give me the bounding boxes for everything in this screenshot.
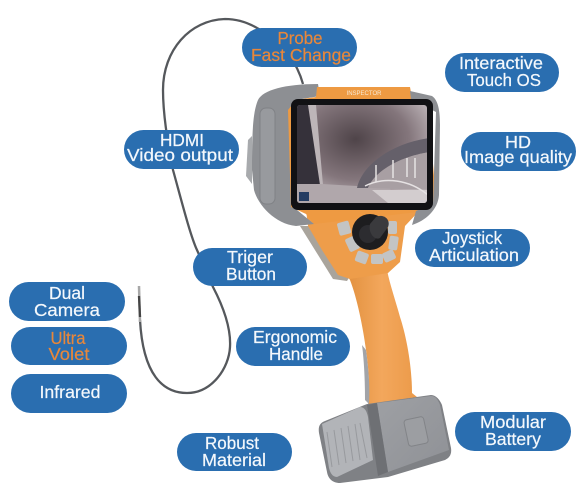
label: Joystick Articulation: Joystick — [442, 228, 502, 248]
label: Ergonomic Handle: Ergonomic — [253, 327, 337, 347]
label: HD Image quality — [461, 132, 576, 171]
label: Joystick Articulation — [415, 228, 530, 267]
label: Triger Button — [193, 247, 307, 286]
camera device — [246, 84, 451, 483]
grip underside — [300, 226, 350, 281]
label: Ergonomic Handle: Handle — [269, 344, 323, 364]
label: Joystick Articulation: Articulation — [429, 245, 519, 265]
label: Infrared — [11, 374, 127, 413]
label: HDMI Video output: Video output — [127, 145, 233, 165]
label: Modular Battery: Battery — [485, 429, 541, 449]
label: Interactive Touch OS — [445, 53, 559, 92]
label: Ultra Violet: Ultra — [50, 328, 86, 348]
left grey bumper — [252, 84, 320, 226]
brand label: INSPECTOR — [347, 91, 382, 97]
handle — [347, 270, 417, 405]
grip module — [306, 210, 420, 279]
screen bezel — [291, 99, 433, 210]
rear left tab — [246, 136, 252, 184]
label: HD Image quality: Image quality — [464, 147, 572, 167]
label: Dual Camera — [9, 282, 125, 321]
left button strip — [260, 108, 275, 204]
label: Modular Battery — [455, 412, 571, 451]
label: Infrared: Infrared — [40, 382, 100, 402]
label: Triger Button: Triger — [227, 247, 273, 267]
label: Ultra Violet: Volet — [48, 344, 90, 364]
label: Probe Fast Change: Probe — [278, 28, 322, 48]
battery — [319, 395, 451, 483]
label: Robust Material — [177, 433, 292, 471]
right grey bumper — [410, 91, 440, 225]
label: HDMI Video output: HDMI — [160, 130, 204, 150]
label: Interactive Touch OS: Interactive — [459, 53, 543, 73]
orange housing — [288, 87, 436, 224]
screen image — [297, 105, 430, 203]
label: Interactive Touch OS: Touch OS — [467, 70, 541, 90]
label: Robust Material: Robust — [205, 433, 259, 453]
label: HD Image quality: HD — [505, 132, 531, 152]
handle grey edge — [362, 345, 369, 404]
probe cable — [139, 19, 303, 393]
label: Dual Camera: Camera — [34, 300, 100, 320]
joystick — [352, 214, 389, 250]
label: Dual Camera: Dual — [49, 283, 85, 303]
label: Modular Battery: Modular — [480, 412, 546, 432]
joystick buttons — [337, 220, 399, 265]
label: HDMI Video output — [124, 130, 239, 169]
label: Probe Fast Change — [242, 28, 357, 67]
label: Robust Material: Material — [202, 450, 266, 470]
label: Probe Fast Change: Fast Change — [251, 45, 351, 65]
battery latch — [404, 416, 429, 447]
label: Triger Button: Button — [226, 264, 276, 284]
label: Ergonomic Handle — [236, 327, 350, 366]
label: Ultra Violet — [11, 327, 127, 365]
